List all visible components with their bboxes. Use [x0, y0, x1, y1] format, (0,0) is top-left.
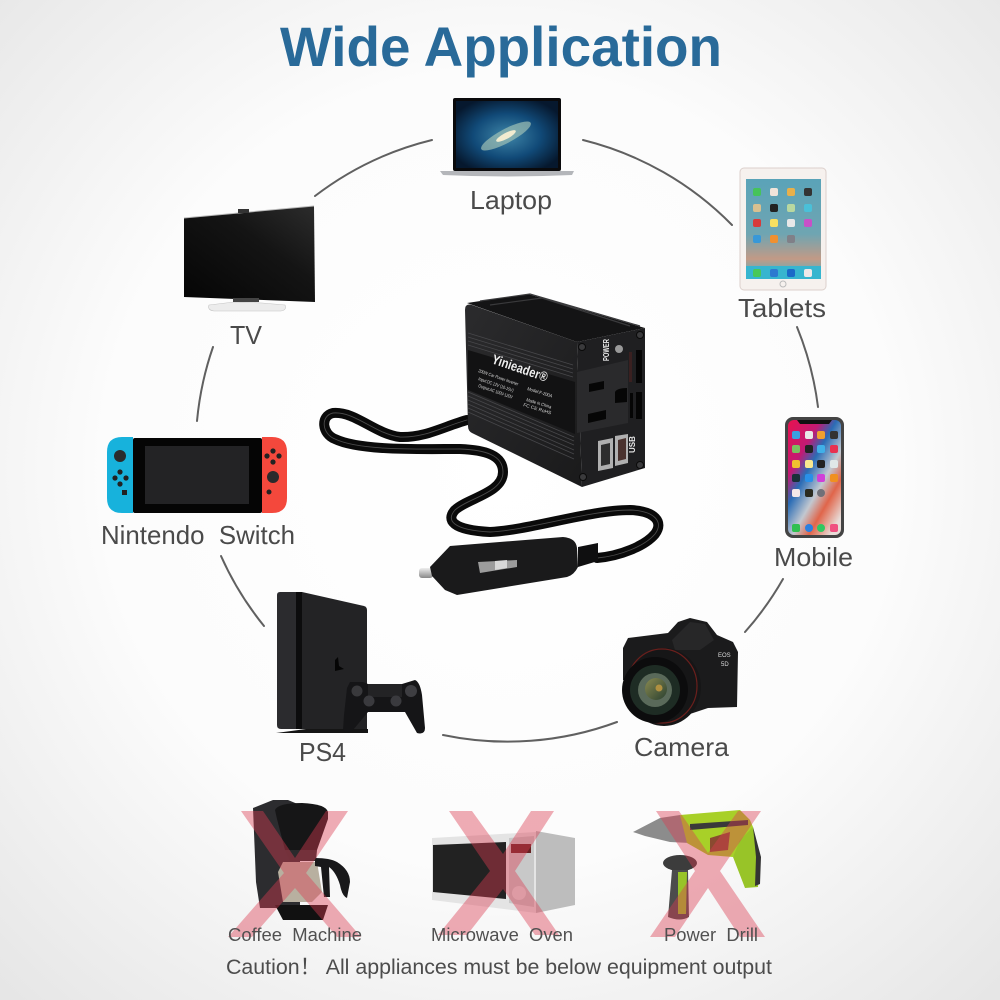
icon: Nintendo Switch: [107, 437, 287, 513]
label band text: Model:F-200A: [527, 386, 554, 399]
laptop: [440, 98, 574, 215]
label band text: Output:AC 100V-120V: [478, 383, 514, 400]
label: TV: TV: [230, 320, 263, 350]
connecting ring arcs: [197, 140, 818, 742]
label: mobile: Mobile: [774, 542, 853, 572]
power drill: [633, 810, 765, 945]
icon: coffee machine: [253, 800, 350, 920]
vents: [629, 350, 642, 419]
label band text: Made in China: [526, 397, 552, 410]
icon: smartphone: [785, 417, 844, 538]
microwave oven: [431, 811, 575, 945]
label: laptop: Laptop: [470, 185, 552, 215]
icon: tablet: [740, 168, 826, 290]
Nintendo Switch: [101, 437, 295, 550]
label band text: 200W Car Power Inverter: [478, 368, 519, 387]
icon: PS4 console: [276, 592, 368, 733]
power indicator and markings: USB: [628, 436, 637, 453]
title: Wide Application: [280, 15, 722, 78]
icon: DSLR camera: EOS: [718, 653, 731, 659]
icon: microwave: [432, 831, 575, 913]
red X mark: [438, 811, 559, 935]
label: Nintendo Switch: Nintendo Switch: [101, 520, 295, 550]
USB ports: [598, 434, 628, 471]
power indicator and markings: [602, 339, 637, 453]
icon: laptop screen: [453, 98, 561, 171]
label band text: [478, 352, 554, 415]
outlet plate: [577, 360, 628, 433]
label: coffee machine: Coffee Machine: [228, 925, 362, 945]
camera: [622, 618, 738, 762]
label band text: Input:DC 12V (10-15V): [478, 376, 515, 393]
label: power drill: Power Drill: [664, 925, 758, 945]
icon: DSLR camera: [622, 618, 738, 726]
icon: DSLR camera: 5D: [721, 662, 729, 668]
screws: [578, 332, 644, 480]
label: microwave oven: Microwave Oven: [431, 925, 573, 945]
icon: laptop base: [440, 171, 574, 176]
product: power inverter with cord: [324, 294, 658, 595]
coffee machine: [228, 800, 362, 945]
label band text: FC CE RoHS: [523, 402, 552, 415]
inverter body: [465, 294, 645, 487]
label: camera: Camera: [634, 732, 730, 762]
cigarette lighter plug: [419, 537, 598, 595]
power indicator and markings: POWER: [602, 339, 611, 361]
section: unsupported appliances: [226, 800, 772, 979]
icon: drill: [633, 810, 761, 920]
icon: television: [184, 206, 315, 311]
power cord: [324, 413, 658, 558]
tablet: [738, 168, 826, 323]
label band text: Yinieader®: [490, 352, 550, 385]
label: PS4: PS4: [299, 737, 346, 767]
red X mark: [228, 811, 361, 937]
mobile: [774, 417, 853, 572]
PS4: [276, 592, 425, 767]
label: tablets: Tablets: [738, 293, 826, 323]
caution note: Caution！ All appliances must be below equipment output: [226, 955, 772, 979]
icon: game controller: [343, 680, 425, 733]
TV: [184, 206, 315, 350]
red X mark: [650, 811, 765, 937]
